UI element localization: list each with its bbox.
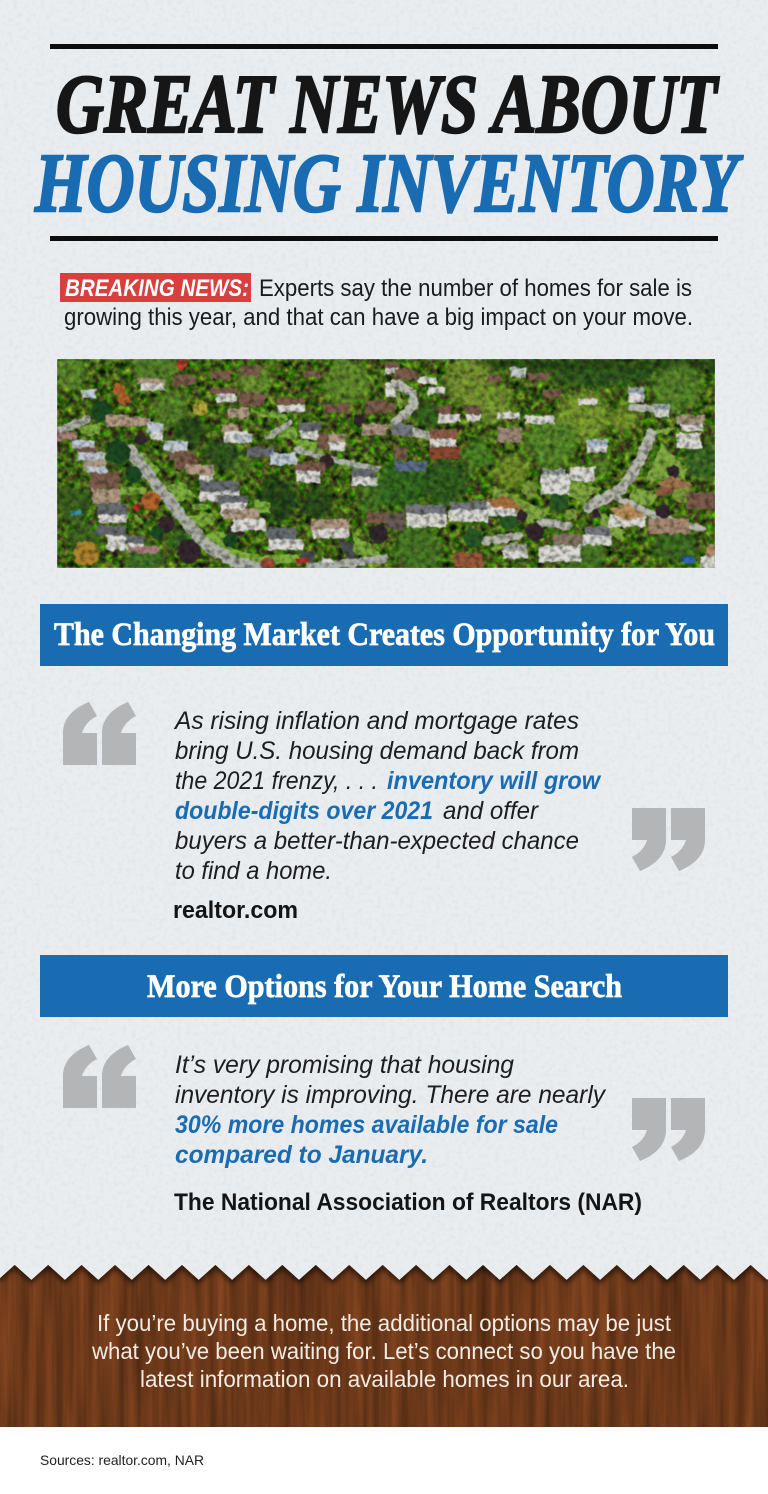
bottom rule — [50, 236, 718, 241]
icon: closing quote mark — [632, 1098, 705, 1161]
left half of photo — [57, 359, 389, 568]
quote text: realtor.com — [173, 707, 601, 885]
quote text: realtor.com: As rising inflation and mortgage rates — [173, 707, 579, 735]
icon: closing quote mark — [632, 808, 705, 871]
white footer strip — [0, 1427, 768, 1494]
breaking news label: BREAKING NEWS: — [65, 275, 249, 302]
call to action text — [91, 1310, 676, 1392]
quote text: NAR: It’s very promising that housing — [175, 1051, 514, 1079]
sources: Sources: realtor.com, NAR — [40, 1452, 204, 1468]
quote text: realtor.com: bring U.S. housing demand back from — [175, 737, 579, 765]
call to action text: If you’re buying a home, the additional options may be just — [97, 1310, 672, 1336]
quote text: NAR: inventory is improving. There are nearly — [175, 1081, 606, 1109]
photo: aerial view of neighborhood — [57, 359, 715, 568]
section header: changing market: The Changing Market Creates Opportunity for You — [54, 617, 715, 653]
quote text: realtor.com: to find a home. — [175, 857, 332, 885]
call to action text: what you’ve been waiting for. Let’s connect so you have the — [91, 1338, 676, 1364]
quote text: realtor.com: the 2021 frenzy, . . . — [175, 767, 378, 795]
attribution: NAR: The National Association of Realtors (NAR) — [174, 1189, 642, 1216]
right half of photo — [378, 359, 718, 579]
section header: more options — [40, 955, 728, 1017]
quote text: realtor.com: and offer — [443, 797, 540, 825]
section header: more options: More Options for Your Home Search — [147, 969, 622, 1005]
houses — [385, 367, 715, 568]
quote text: realtor.com: buyers a better-than-expected chance — [175, 827, 579, 855]
quote text: NAR — [175, 1051, 606, 1169]
wood footer panel — [0, 1260, 768, 1427]
top rule — [50, 44, 718, 49]
quote text: NAR: compared to January. — [175, 1141, 428, 1169]
icon: opening quote mark — [63, 702, 136, 765]
quote text: NAR: 30% more homes available for sale — [175, 1111, 558, 1139]
houses — [99, 382, 378, 551]
intro text block: Experts say the number of homes for sale is — [259, 275, 692, 302]
intro text block — [60, 273, 693, 331]
icon: opening quote mark — [63, 1045, 136, 1108]
quote text: realtor.com: inventory will grow — [387, 767, 601, 795]
call to action text: latest information on available homes in our area. — [140, 1366, 629, 1392]
intro text block: growing this year, and that can have a big impact on your move. — [64, 304, 693, 331]
section header: changing market — [40, 604, 728, 666]
quote text: realtor.com: double-digits over 2021 — [175, 797, 433, 825]
attribution: realtor.com: realtor.com — [173, 897, 298, 924]
title — [34, 58, 743, 230]
